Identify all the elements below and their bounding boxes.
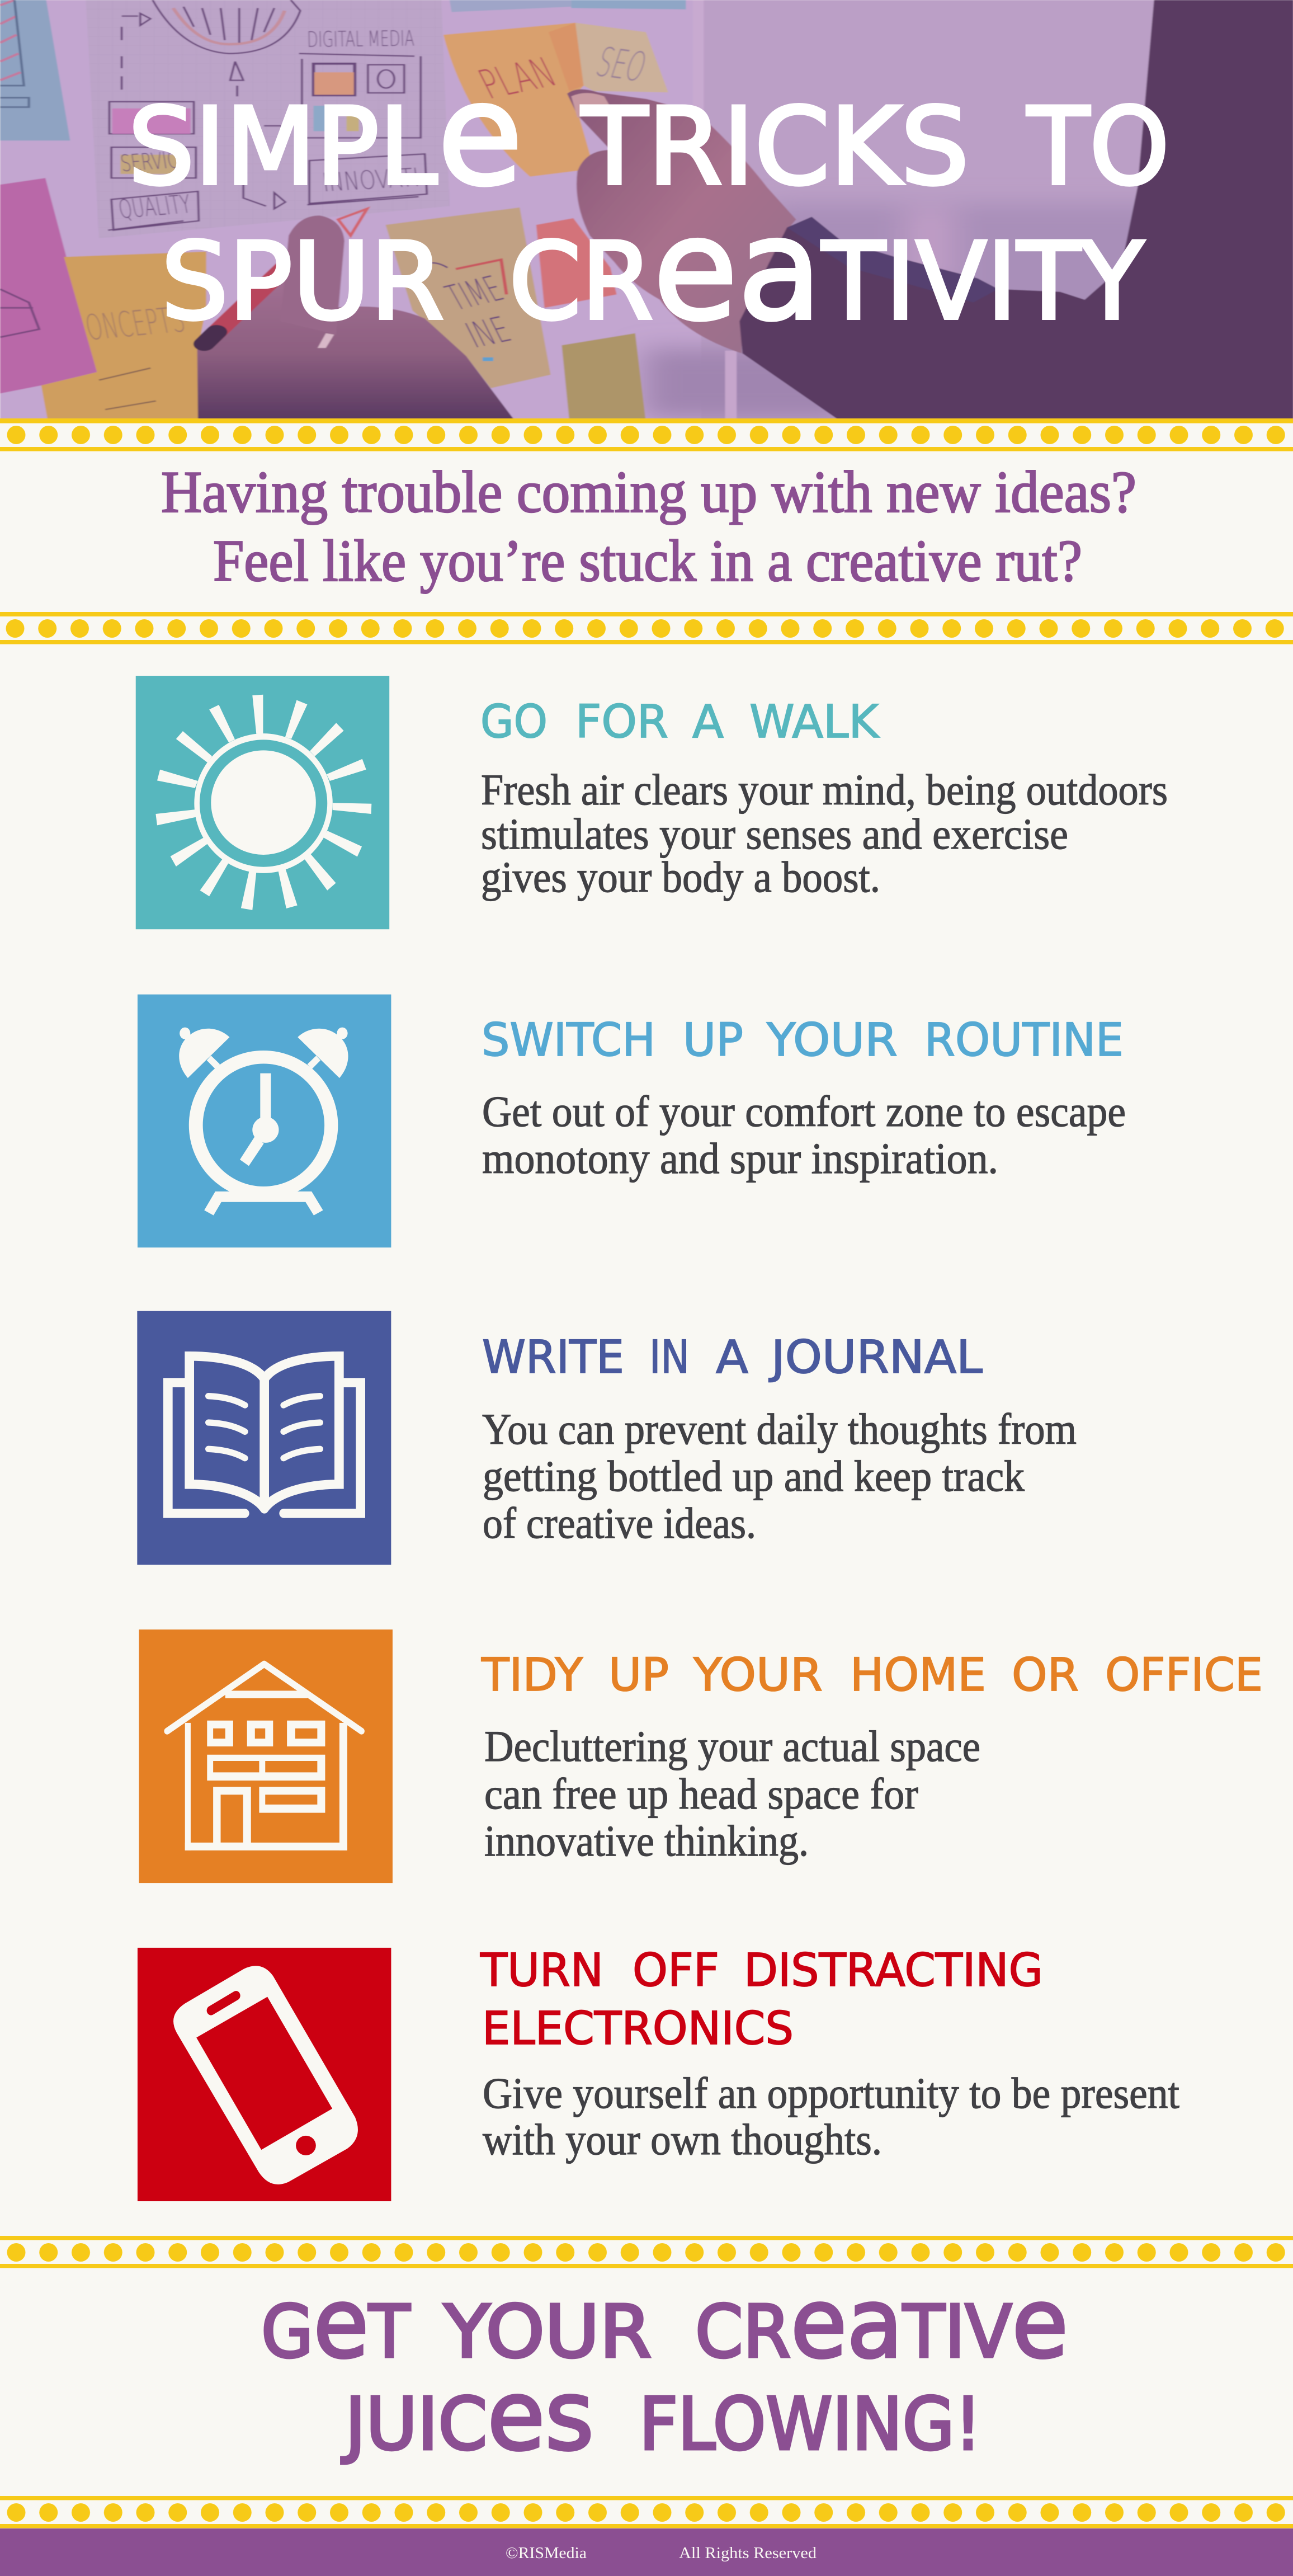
footer bar: All Rights Reserved (679, 2545, 817, 2562)
hand right (567, 90, 796, 354)
tan timeline note (386, 208, 551, 388)
closing call to action: JUICes (345, 2360, 597, 2472)
panel: write in a journal (137, 1311, 1077, 1565)
divider band 2 (0, 612, 1293, 644)
heading: HOME (850, 1649, 986, 1702)
heading: TURN (480, 1944, 603, 1997)
body text (482, 1087, 1126, 1183)
closing call to action: YOUR (443, 2290, 652, 2374)
heading: UP (608, 1649, 669, 1702)
closing call to action: CReaTIVe (695, 2267, 1071, 2380)
left blue note (0, 0, 70, 140)
heading: OFF (633, 1944, 719, 1997)
heading: ELECTRONICS (482, 2003, 794, 2055)
closing call to action (261, 2267, 1068, 2472)
body text (482, 1405, 1077, 1547)
top blue notes (450, 0, 571, 12)
heading (480, 1944, 1043, 2055)
body text (484, 1722, 980, 1865)
heading: JOURNAL (768, 1331, 983, 1384)
footer bar (0, 2528, 1293, 2576)
title: CReaTIVITY (509, 188, 1152, 352)
panel: switch up your routine (138, 995, 1126, 1247)
pink note (0, 178, 97, 393)
intro question text: Feel like you’re stuck in a creative rut? (213, 528, 1082, 594)
panel: go for a walk (136, 676, 1168, 929)
heading: TIDY (481, 1649, 583, 1702)
heading: OFFICE (1105, 1649, 1263, 1702)
heading: A (692, 696, 724, 748)
body text: getting bottled up and keep track (483, 1452, 1025, 1500)
hero photo: hands placing sticky notes (0, 0, 1293, 419)
hero photo: hands placing sticky notes: TIME (439, 269, 511, 319)
body text: innovative thinking. (484, 1816, 809, 1865)
icon: sun (136, 676, 389, 929)
title: TO (1027, 85, 1169, 209)
hero photo: hands placing sticky notes: SEO (591, 38, 652, 91)
divider band 4 (0, 2496, 1293, 2528)
heading: OR (1012, 1649, 1079, 1702)
body text: You can prevent daily thoughts from (482, 1405, 1077, 1453)
icon: alarm clock (138, 995, 391, 1247)
heading: SWITCH (482, 1014, 655, 1067)
divider band 3 (0, 2236, 1293, 2268)
body text: of creative ideas. (483, 1499, 756, 1547)
body text (483, 2069, 1179, 2164)
heading: FOR (575, 696, 668, 748)
hero photo: hands placing sticky notes: INNOVATI (320, 162, 421, 197)
body text (481, 765, 1168, 901)
hero photo: hands placing sticky notes: PLAN (471, 49, 564, 108)
title: SPUR (161, 220, 444, 343)
hero photo: hands placing sticky notes: ONCEPTS (82, 299, 188, 349)
body text: with your own thoughts. (483, 2115, 882, 2164)
heading: A (716, 1331, 748, 1384)
icon: smartphone (138, 1948, 391, 2201)
intro question text: Having trouble coming up with new ideas? (161, 459, 1136, 525)
hero photo: hands placing sticky notes: INE (459, 309, 518, 356)
hand left with pen (197, 255, 513, 419)
hero photo: hands placing sticky notes: SERVIC (119, 147, 181, 177)
body text: can free up head space for (484, 1769, 918, 1818)
frame line (701, 0, 704, 110)
body text: monotony and spur inspiration. (482, 1134, 998, 1183)
body text: Get out of your comfort zone to escape (482, 1087, 1126, 1136)
heading: UP (683, 1014, 743, 1067)
title: TRICKS (581, 85, 969, 209)
bottom note (561, 333, 645, 419)
red note (536, 218, 617, 308)
body text: stimulates your senses and exercise (481, 809, 1068, 858)
big paper (86, 0, 450, 238)
icon: open book (137, 1311, 391, 1565)
heading: DISTRACTING (744, 1944, 1043, 1997)
footer bar: ©RISMedia (506, 2545, 587, 2562)
heading: IN (649, 1331, 690, 1384)
hero photo: hands placing sticky notes: QUALITY (116, 189, 193, 224)
body text: Fresh air clears your mind, being outdoors (481, 765, 1168, 814)
panel: tidy up your home or office (139, 1630, 1263, 1883)
diagram sketches (108, 0, 427, 230)
sleeve and dark background (739, 0, 1293, 419)
body text: gives your body a boost. (481, 853, 880, 901)
intro question text (161, 459, 1136, 594)
tan seo note (575, 23, 668, 92)
icon: house (139, 1630, 393, 1883)
heading: WRITE (482, 1331, 624, 1384)
panel: turn off distracting electronics (138, 1944, 1179, 2201)
title (128, 53, 1169, 352)
heading: ROUTINE (924, 1014, 1124, 1067)
heading: GO (480, 696, 548, 748)
heading: YOUR (693, 1649, 823, 1702)
heading: WALK (749, 696, 880, 748)
orange plan note (443, 23, 594, 177)
closing call to action: GeT (261, 2267, 413, 2380)
heading: YOUR (766, 1014, 898, 1067)
closing call to action: FLOWING! (639, 2382, 981, 2466)
title: SIMPLe (128, 53, 524, 217)
body text: Decluttering your actual space (484, 1722, 980, 1770)
divider band 1 (0, 418, 1293, 451)
body text: Give yourself an opportunity to be present (483, 2069, 1179, 2117)
yellow lower left note (41, 252, 206, 419)
hero photo: hands placing sticky notes: DIGITAL MEDIA (306, 26, 414, 52)
